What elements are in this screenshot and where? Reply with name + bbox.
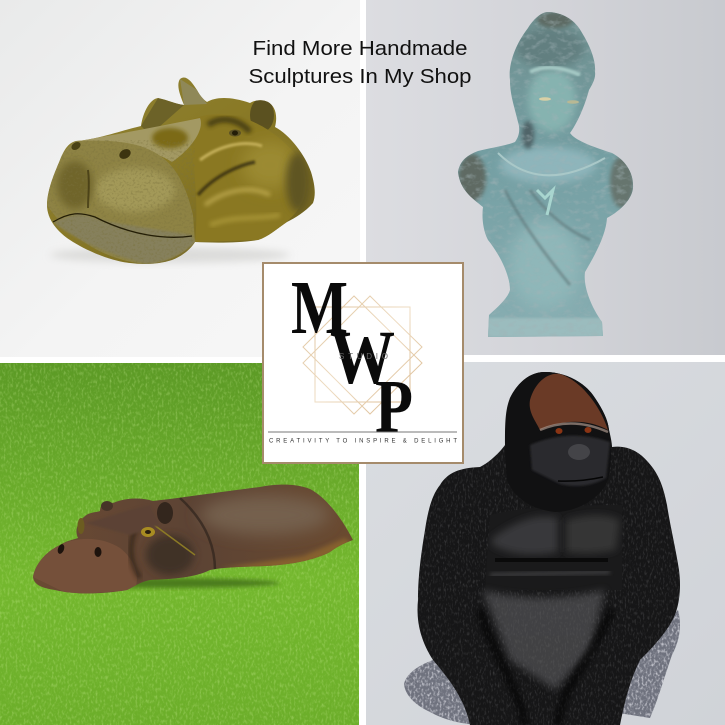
logo panel <box>263 263 463 463</box>
panel: hippo in grass <box>0 363 359 725</box>
icon: gorilla legs <box>400 605 685 725</box>
panel: verdigris bust sculpture <box>366 0 725 355</box>
logo monogram: P <box>375 365 413 449</box>
panel: gorilla sculpture <box>366 362 725 725</box>
icon: gold hippo head <box>45 77 315 265</box>
title <box>248 37 472 88</box>
title: Sculptures In My Shop <box>248 65 472 88</box>
logo monogram <box>291 266 413 449</box>
logo studio label: STUDIO <box>339 352 388 361</box>
logo tagline: CREATIVITY TO INSPIRE & DELIGHT <box>269 438 457 444</box>
logo gold frames <box>303 296 422 414</box>
icon: gorilla head <box>505 372 611 512</box>
hippo shadow on grass <box>40 578 280 588</box>
logo monogram: M <box>291 266 348 350</box>
hippo cast shadow <box>50 247 290 263</box>
icon: gorilla body <box>415 372 685 725</box>
title: Find More Handmade <box>252 37 468 60</box>
logo monogram: W <box>330 316 395 400</box>
panel: gold hippo sculpture <box>0 0 360 357</box>
icon: brown hippo <box>33 485 353 595</box>
icon: bust of a woman <box>455 8 635 340</box>
logo rule <box>268 432 457 433</box>
